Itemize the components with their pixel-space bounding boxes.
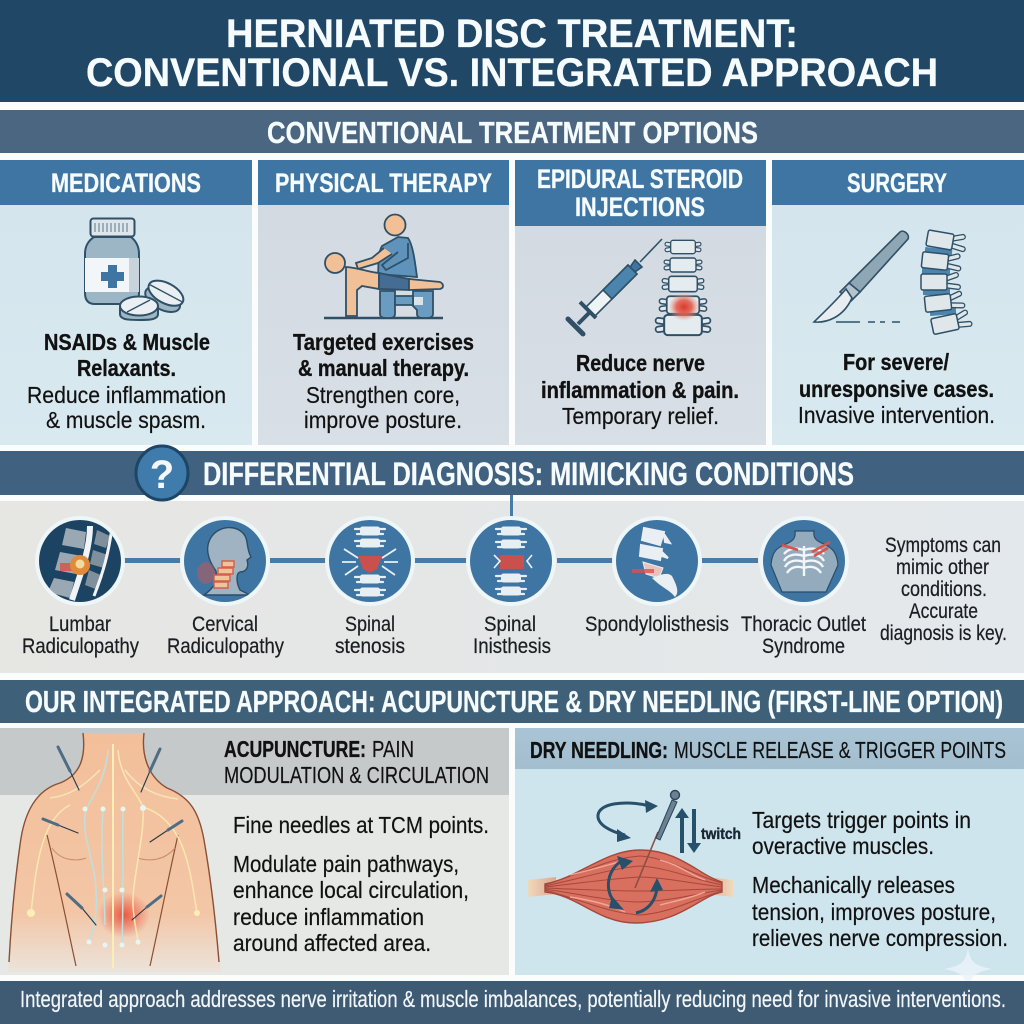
physical therapy text [293,329,474,433]
physical therapy heading [258,160,509,205]
acupuncture heading [224,736,489,788]
acupuncture heading: ACUPUNCTURE: [224,736,366,762]
epidural text [541,350,739,429]
acupuncture text: Fine needles at TCM points. [233,812,489,838]
acupuncture heading: MODULATION & CIRCULATION [224,762,489,788]
icon: thoracic outlet syndrome [759,516,849,606]
dry needling text: Targets trigger points in [752,807,971,833]
icon: spine side view [921,230,970,335]
medications heading [0,160,252,205]
title banner: HERNIATED DISC TREATMENT: [226,12,798,56]
physical therapy text: improve posture. [304,407,462,433]
medications text: Relaxants. [77,355,176,381]
illustration: muscle with needle [528,790,741,923]
icon: syringe [568,239,662,334]
epidural heading: INJECTIONS [575,192,705,222]
acupuncture heading: PAIN [372,736,414,762]
icon: lumbar radiculopathy [35,516,125,606]
icon: question mark: ? [150,453,174,497]
acupuncture text: enhance local circulation, [233,877,469,903]
acupuncture text [233,812,489,956]
medications text: & muscle spasm. [46,407,206,433]
surgery heading [772,160,1024,205]
physical therapy text: Strengthen core, [306,382,460,408]
note: accurate diagnosis: Symptoms can [885,534,1001,557]
section heading: conventional treatment options: CONVENTIONAL TREATMENT OPTIONS [267,115,758,150]
condition labels: Lumbar [49,613,111,636]
differential diagnosis heading [0,451,1024,495]
icon: spinal instability [466,516,556,606]
note: accurate diagnosis: Accurate [909,600,978,623]
physical therapy heading: PHYSICAL THERAPY [275,168,492,198]
icon: therapist and patient [324,214,443,318]
medications text: NSAIDs & Muscle [44,329,210,355]
note: accurate diagnosis: mimic other [896,556,989,579]
surgery text: Invasive intervention. [798,402,995,428]
icon: lumbar spine with inflamed disc [658,240,708,335]
sparkle mark [944,948,992,990]
icon: spondylolisthesis [612,516,702,606]
medications heading: MEDICATIONS [51,168,201,198]
surgery text: For severe/ [843,349,950,375]
dry needling text: Mechanically releases [752,872,955,898]
dry needling text [752,807,1008,951]
dry needling heading: DRY NEEDLING: [530,737,668,763]
section heading: conventional treatment options [0,110,1024,153]
epidural heading: EPIDURAL STEROID [537,164,743,194]
condition labels: Spondylolisthesis [585,613,729,636]
needle [635,832,658,888]
physical therapy text: & manual therapy. [298,355,469,381]
icon: pill bottle and tablets [85,218,187,320]
icon: cervical radiculopathy [180,516,270,606]
illustration: back with acupuncture needles [8,733,221,972]
panel: acupuncture [0,728,509,975]
twist arrow [598,800,658,842]
medications text [27,329,226,433]
condition labels: Radiculopathy [22,635,139,658]
differential diagnosis heading: DIFFERENTIAL DIAGNOSIS: MIMICKING CONDITIONS [203,456,854,492]
note: accurate diagnosis [880,534,1007,645]
footer banner [0,981,1024,1024]
epidural text: inflammation & pain. [541,377,739,403]
note: accurate diagnosis: conditions. [901,578,987,601]
panel: dry needling [515,728,1024,990]
icon: spinal stenosis [325,516,415,606]
epidural text: Temporary relief. [562,403,719,429]
icon: scalpel [814,231,908,322]
dry needling text: overactive muscles. [752,833,934,859]
medications text: Reduce inflammation [27,382,226,408]
panel: surgery [772,160,1024,445]
twitch arrows [675,808,701,853]
physical therapy text: Targeted exercises [293,329,474,355]
panel: physical therapy [258,160,509,445]
condition labels: Cervical [192,613,258,636]
condition labels [22,613,866,658]
condition labels: Spinal [345,613,395,636]
meridian points [27,805,200,948]
surgery heading: SURGERY [847,168,947,198]
condition labels: Spinal [484,613,536,636]
title banner [0,0,1024,102]
connector lines [124,495,758,563]
condition labels: Thoracic Outlet [741,613,866,636]
surgery text: unresponsive cases. [799,376,994,402]
meridian lines [31,744,197,968]
epidural heading [515,160,766,226]
acupuncture text: reduce inflammation [233,904,424,930]
needles [43,747,182,925]
condition labels: Syndrome [762,635,845,658]
dry needling heading [530,737,1006,763]
twitch label: twitch [701,826,741,843]
dry needling text: tension, improves posture, [752,899,996,925]
condition labels: Radiculopathy [167,635,284,658]
icon: question mark [136,446,188,500]
condition labels: Inisthesis [473,635,551,658]
acupuncture text: around affected area. [233,930,431,956]
section: differential diagnosis panel [0,446,1024,673]
panel: medications [0,160,252,445]
condition labels: stenosis [335,635,405,658]
epidural text: Reduce nerve [576,350,705,376]
acupuncture text: Modulate pain pathways, [233,851,459,877]
rotation arrows [608,860,657,913]
title banner: CONVENTIONAL VS. INTEGRATED APPROACH [86,51,938,95]
panel: epidural steroid injections [515,160,766,445]
surgery text [798,349,995,428]
